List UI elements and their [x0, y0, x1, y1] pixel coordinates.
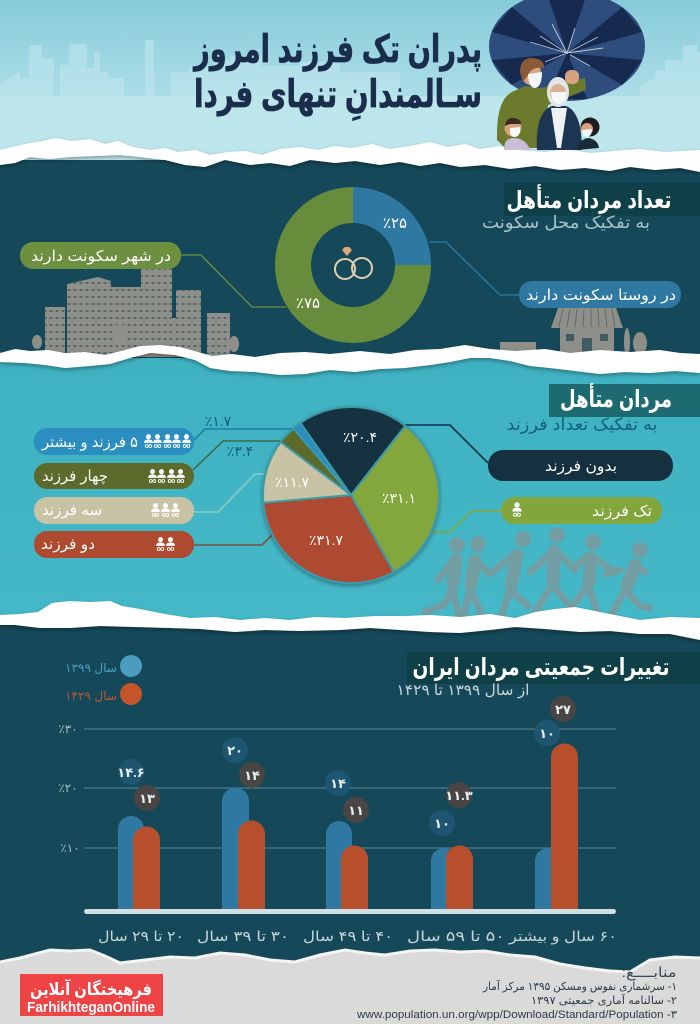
illustration: running children silhouettes [425, 527, 650, 620]
label: village residents [519, 281, 681, 308]
panel: married men by residence [20, 183, 700, 343]
figure: father [497, 58, 586, 148]
value bubbles: ۲۰ [227, 743, 243, 758]
title [193, 29, 482, 121]
connector: two children [194, 533, 274, 545]
subheading: به تفکیک محل سکونت [482, 213, 650, 232]
connector: no children [403, 425, 488, 463]
logo: فرهیختگان آنلاین [30, 978, 152, 1000]
label: city residents [20, 242, 181, 269]
value bubbles: ۱۴ [330, 776, 346, 791]
pie values: ٪۳۱.۷ [309, 532, 343, 548]
connector: one child [432, 511, 501, 532]
figure: right child [577, 118, 600, 150]
panel: married men by number of children [34, 383, 700, 583]
y axis labels: ٪۳۰ [58, 722, 78, 736]
bars: 20 to 29 [118, 816, 160, 909]
donut chart: ٪۲۵ [383, 215, 407, 232]
pie values: ٪۳۱.۱ [382, 490, 416, 506]
connector: five children [193, 429, 297, 441]
title: پدران تک فرزند امروز [193, 29, 482, 72]
label: one child [501, 497, 662, 524]
connector: city [181, 255, 286, 307]
value bubbles: ۱۱.۳ [445, 788, 473, 803]
y axis labels [58, 722, 80, 855]
value bubbles: ۱۳ [139, 791, 155, 806]
value bubbles: ۱۰ [539, 726, 555, 741]
label: one child: تک فرزند [592, 503, 652, 520]
sources: ۱- سرشماری نفوس ومسکن ۱۳۹۵ مرکز آمار [482, 979, 677, 993]
value bubbles: ۱۱ [348, 803, 364, 818]
sources [356, 964, 677, 1021]
figure: grandfather [537, 77, 582, 150]
label: no children: بدون فرزند [545, 458, 617, 475]
title: سـالمندانِ تنهای فردا [194, 74, 482, 121]
connector: four children [193, 441, 283, 470]
donut chart: ٪۷۵ [296, 295, 320, 312]
panel: dark section background [0, 160, 700, 366]
torn paper strip: middle [0, 345, 700, 375]
bar chart [84, 744, 616, 914]
panel: teal section background [0, 358, 700, 626]
x axis labels: ۵۰ تا ۵۹ سال [407, 928, 505, 944]
sources: ۲- سالنامه آماری جمعیتی ۱۳۹۷ [531, 993, 677, 1007]
logo: FarhikhteganOnline [27, 999, 155, 1016]
value bubbles: ۱۰ [434, 816, 450, 831]
x axis labels: ۶۰ سال و بیشتر [508, 928, 617, 945]
logo [20, 974, 163, 1016]
torn paper strip: lower [0, 601, 700, 640]
label: city residents: در شهر سکونت دارند [31, 248, 171, 265]
bars: 50 to 59 [431, 846, 473, 909]
bars: 40 to 49 [326, 821, 368, 909]
sources: ۳- www.population.un.org/wpp/Download/Standard/Population [356, 1009, 677, 1021]
illustration: village house [500, 308, 647, 358]
value bubbles [117, 696, 576, 836]
illustration: family under umbrella [489, 0, 645, 150]
label: four children [34, 463, 194, 489]
label: three children: سه فرزند [42, 502, 102, 519]
donut chart [275, 187, 431, 343]
x axis labels: ۴۰ تا ۴۹ سال [303, 928, 393, 944]
label: three children [34, 497, 194, 524]
value bubbles: ۱۴ [244, 768, 260, 783]
legend: سال ۱۳۹۹ [65, 661, 117, 675]
label: village residents: در روستا سکونت دارند [526, 287, 676, 304]
connector: three children [194, 474, 265, 512]
value bubbles: ۲۷ [555, 702, 571, 717]
illustration: city buildings [32, 268, 239, 357]
x axis labels [98, 928, 617, 945]
y axis labels: ٪۱۰ [60, 841, 80, 855]
label: two children: دو فرزند [41, 536, 95, 553]
value bubbles: ۱۴.۶ [117, 765, 145, 780]
y axis labels: ٪۲۰ [58, 781, 78, 795]
label: five or more children: ۵ فرزند و بیشتر [41, 434, 138, 451]
legend [65, 655, 142, 705]
x axis labels: ۳۰ تا ۳۹ سال [197, 928, 289, 944]
label: no children [488, 450, 673, 481]
panel: sky background [0, 0, 700, 175]
label: five or more children [34, 428, 194, 455]
panel: footer paper [0, 950, 700, 1024]
figure: left child [504, 118, 530, 150]
panel: population change [58, 652, 700, 945]
subheading: از سال ۱۳۹۹ تا ۱۴۲۹ [396, 682, 530, 699]
subheading: به تفکیک تعداد فرزند [506, 415, 658, 434]
icon: umbrella [489, 0, 645, 101]
connector: village [429, 242, 519, 295]
bars: 60 and over [535, 744, 578, 909]
torn paper strip: upper [0, 138, 700, 172]
x axis labels: ۲۰ تا ۲۹ سال [98, 928, 184, 944]
pie values [205, 413, 416, 548]
legend: سال ۱۴۲۹ [65, 689, 117, 703]
pie values: ٪۱۱.۷ [275, 474, 309, 490]
icon: wedding rings [335, 247, 372, 279]
sources: منابــــع: [622, 964, 676, 981]
pie values: ٪۲۰.۴ [343, 429, 377, 445]
panel: population section background [0, 624, 700, 970]
label: two children [34, 531, 194, 558]
pie values: ٪۱.۷ [205, 413, 232, 429]
label: four children: چهار فرزند [42, 468, 108, 485]
pie chart [263, 407, 439, 583]
pie values: ٪۳.۴ [227, 443, 253, 459]
bars: 30 to 39 [222, 788, 265, 909]
